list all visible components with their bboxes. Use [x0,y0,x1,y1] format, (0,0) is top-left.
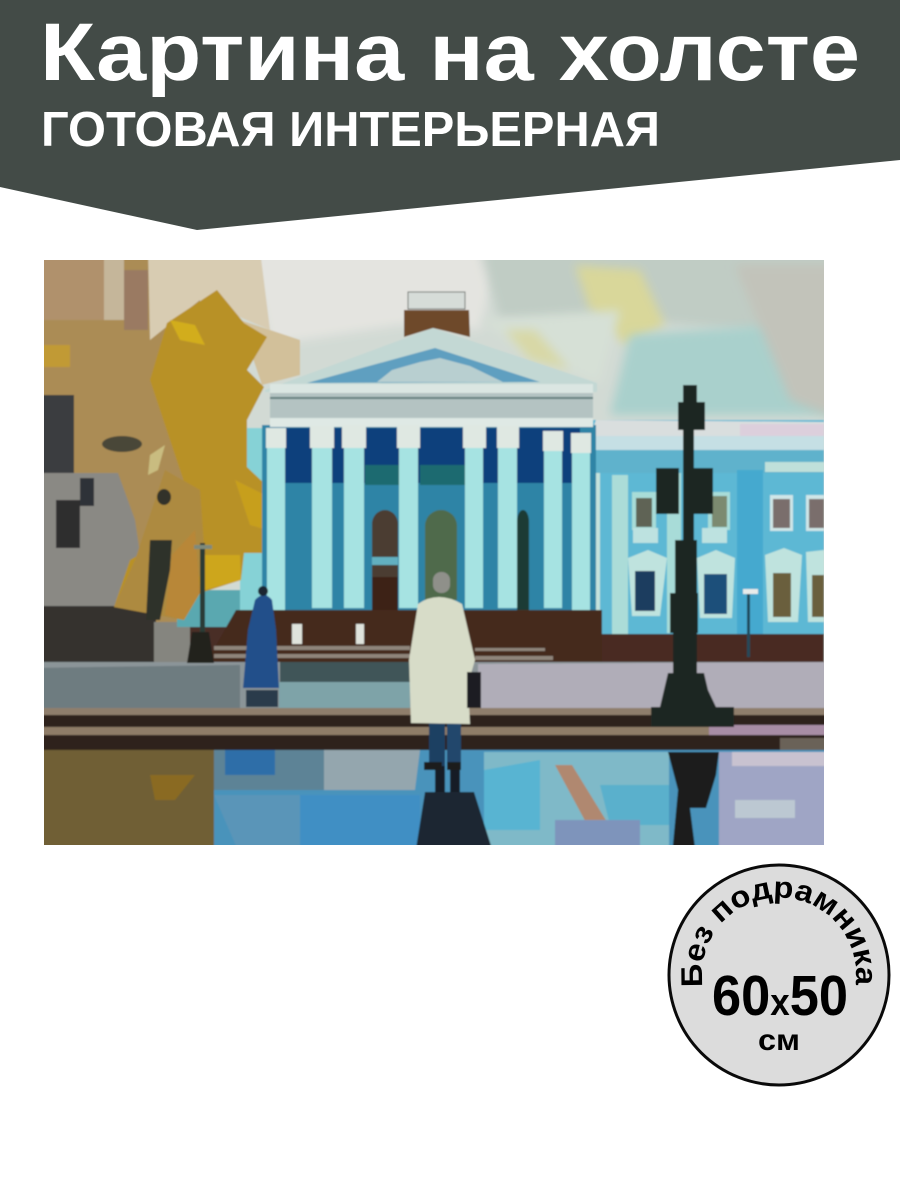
sky [200,260,824,662]
autumn tree [102,290,268,621]
left background wall [44,260,300,663]
figure: woman in blue [243,586,279,707]
doors [371,509,398,578]
small street lamp [187,543,214,663]
badge circle [669,865,889,1085]
title: Картина на холсте [40,7,860,98]
curved label: Без подрамника [681,882,872,986]
column capitals [266,425,591,453]
side wing [590,420,824,636]
portico [262,328,597,618]
figure: man in white coat [409,572,481,770]
water reflection [44,748,824,845]
painting: building and square [30,250,840,855]
small lamp on the right [743,589,758,657]
street lamp [651,385,734,727]
size value: 60х50 [712,964,848,1028]
size badge [668,864,890,1086]
subtitle: ГОТОВАЯ ИНТЕРЬЕРНАЯ [41,103,660,157]
unit: см [758,1024,800,1057]
plinth and steps [205,610,824,664]
columns [267,445,590,610]
header banner [0,0,900,230]
square [30,662,840,752]
roof structure [404,292,470,337]
